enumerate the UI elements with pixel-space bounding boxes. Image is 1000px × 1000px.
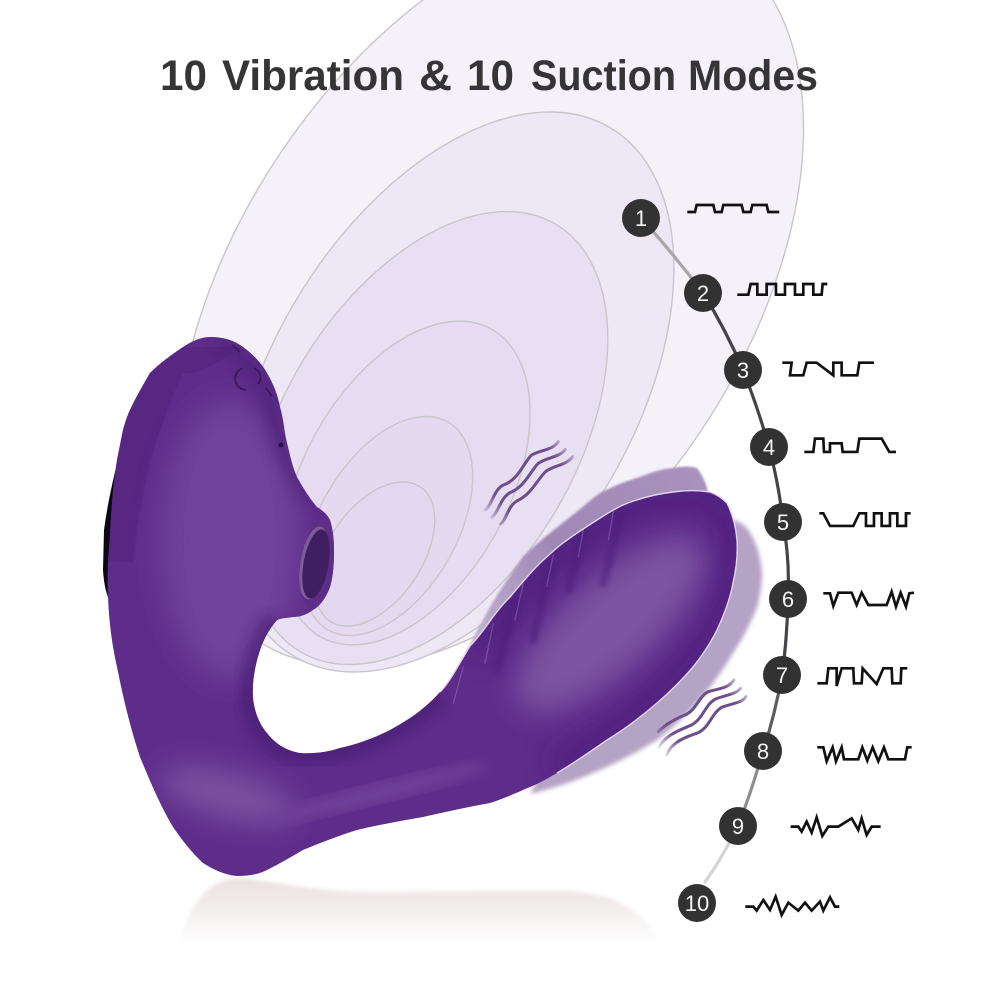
badge 7 [763,656,801,694]
suction mouth interior [302,530,330,598]
indicator dot [278,442,284,448]
badge 7: 7 [776,663,788,688]
infographic canvas [103,0,914,928]
title: & [419,52,452,100]
head light area [160,400,300,680]
badge 6 [769,580,807,618]
title: 10 [467,52,514,100]
arm ribs [453,512,620,703]
badge 1: 1 [635,206,647,231]
badge 2 [684,274,722,312]
arm upper dark edge [470,493,735,773]
badge 8: 8 [757,739,769,764]
badge 2: 2 [697,281,709,306]
vibration squiggles: suction [485,442,573,524]
badge 6: 6 [782,587,794,612]
badge 10 [678,884,716,922]
badge 10: 10 [685,891,709,916]
badge 8 [744,732,782,770]
badge 3: 3 [737,358,749,383]
title: Vibration [222,52,404,100]
suction pulse rings [47,0,933,780]
title: 10 [160,52,207,100]
suction mouth opening [299,526,326,600]
ghost of arm: motion blur lower [530,520,762,794]
waveforms 6-10 [745,592,914,915]
badge 4 [750,428,788,466]
title: Modes [688,52,818,100]
badge 1 [622,199,660,237]
shaft light area [296,764,478,820]
black control strip [103,436,124,600]
ghost of arm: motion blur upper [445,466,708,690]
mode timeline curve [641,218,788,882]
badge 5 [764,503,802,541]
arm edge highlight [440,490,737,773]
title: Suction [531,52,676,100]
device body [108,337,737,876]
badge 4: 4 [763,435,775,460]
title [160,52,818,100]
base light area [156,756,298,834]
badge 9: 9 [732,814,744,839]
badge 9 [719,807,757,845]
badge 3 [724,351,762,389]
arm light area [507,528,714,721]
waveforms 1-5 [687,205,911,526]
head left facet [108,347,219,560]
mode badges [622,199,807,922]
vibration squiggles: arm [658,680,746,755]
floor shadow [178,878,660,945]
neck inner dark curve [253,620,440,753]
control buttons [232,345,272,396]
badge 5: 5 [777,510,789,535]
head top shadow [216,337,315,504]
suction mouth rim [314,518,334,610]
